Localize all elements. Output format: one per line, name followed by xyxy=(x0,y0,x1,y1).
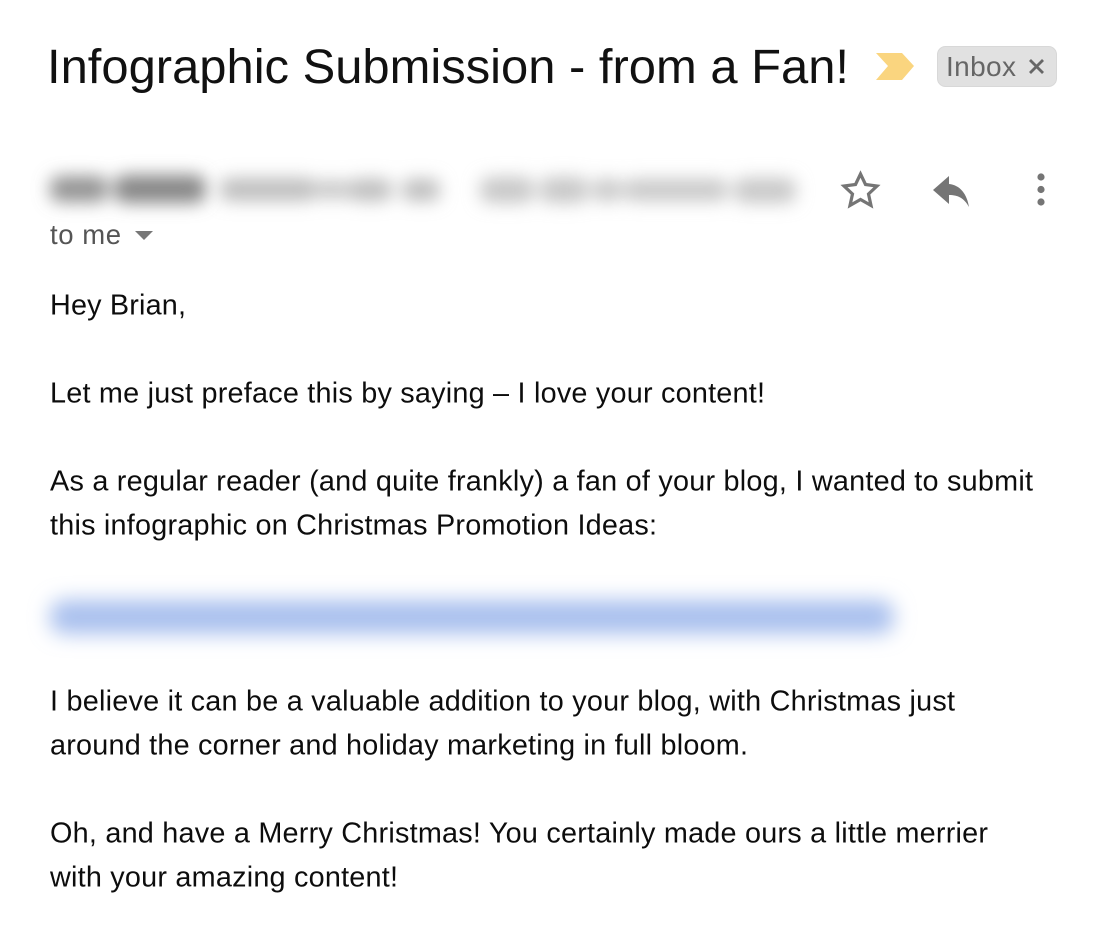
icon: star xyxy=(844,174,877,206)
paragraph: closing: Oh, and have a Merry Christmas! You certainly made ours a little merrier xyxy=(50,818,988,850)
greeting: Hey Brian, xyxy=(50,290,186,322)
paragraph: value: around the corner and holiday marketing in full bloom. xyxy=(50,730,748,762)
recipient line: to me xyxy=(50,219,121,250)
blurred link xyxy=(50,600,894,634)
paragraph: submission: this infographic on Christmas Promotion Ideas: xyxy=(50,510,657,542)
blurred timestamp xyxy=(480,177,796,203)
paragraph: closing: with your amazing content! xyxy=(49,862,398,894)
title: Infographic Submission - from a Fan! xyxy=(47,41,849,94)
blurred sender email xyxy=(220,178,440,201)
inbox label: Inbox xyxy=(946,51,1016,82)
icon: more menu xyxy=(1037,173,1045,206)
paragraph: preface: Let me just preface this by saying – I love your content! xyxy=(50,378,765,410)
paragraph: value xyxy=(50,686,955,762)
recipient line xyxy=(50,219,153,250)
paragraph: closing xyxy=(49,818,988,894)
paragraph: value: I believe it can be a valuable addition to your blog, with Christmas just xyxy=(50,686,955,718)
paragraph: submission xyxy=(50,466,1033,542)
icon: importance marker xyxy=(876,53,914,80)
icon: reply arrow xyxy=(933,176,969,207)
inbox label xyxy=(938,46,1056,86)
paragraph: submission: As a regular reader (and quite frankly) a fan of your blog, I wanted to submit xyxy=(50,466,1033,498)
icon: dropdown arrow xyxy=(135,231,153,240)
blurred sender name xyxy=(50,175,206,203)
